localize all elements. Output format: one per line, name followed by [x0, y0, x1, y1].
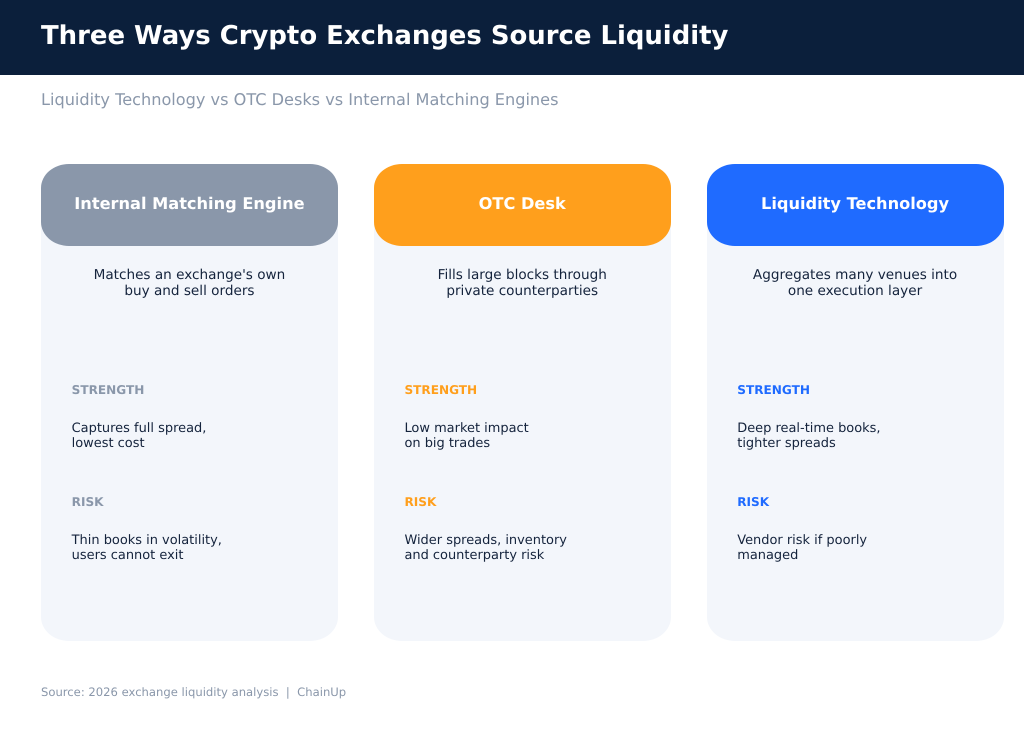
panel header: liquidity technology	[707, 164, 1004, 246]
risk label: RISK	[737, 495, 769, 509]
source footnote: Source: 2026 exchange liquidity analysis | ChainUp	[41, 685, 346, 699]
strength text: Deep real-time books,	[737, 420, 881, 436]
risk text: managed	[737, 548, 798, 563]
strength text	[72, 420, 206, 451]
panel header: liquidity technology: Liquidity Technology	[761, 194, 949, 213]
strength text: Captures full spread,	[72, 420, 206, 436]
description: private counterparties	[446, 283, 598, 299]
strength text: Low market impact	[404, 420, 529, 436]
strength text: lowest cost	[72, 436, 145, 451]
title banner	[0, 0, 1024, 75]
strength text	[737, 420, 881, 451]
strength label: STRENGTH	[404, 383, 477, 397]
description	[94, 267, 285, 299]
description: buy and sell orders	[124, 283, 254, 299]
risk text	[737, 532, 867, 563]
risk text: Wider spreads, inventory	[404, 532, 567, 548]
risk text: and counterparty risk	[404, 548, 544, 563]
title: Three Ways Crypto Exchanges Source Liquidity	[41, 20, 728, 50]
panel header: internal matching engine	[41, 164, 338, 246]
risk label: RISK	[404, 495, 436, 509]
panel: liquidity technology	[707, 164, 1004, 641]
risk text: Vendor risk if poorly	[737, 532, 867, 548]
subtitle: Liquidity Technology vs OTC Desks vs Internal Matching Engines	[41, 90, 558, 109]
strength text: on big trades	[404, 436, 490, 451]
risk text: users cannot exit	[72, 548, 183, 563]
description: Fills large blocks through	[438, 267, 607, 283]
risk text: Thin books in volatility,	[72, 532, 222, 548]
description: Matches an exchange's own	[94, 267, 285, 283]
description: one execution layer	[788, 283, 922, 299]
panel header: otc desk: OTC Desk	[479, 194, 566, 213]
strength text: tighter spreads	[737, 436, 836, 451]
panel: internal matching engine	[41, 164, 338, 641]
description: Aggregates many venues into	[753, 267, 957, 283]
panel header: otc desk	[374, 164, 671, 246]
risk text	[72, 532, 222, 563]
strength label: STRENGTH	[72, 383, 144, 397]
description	[438, 267, 607, 299]
panel: otc desk	[374, 164, 671, 641]
strength text	[404, 420, 529, 451]
strength label: STRENGTH	[737, 383, 810, 397]
risk text	[404, 532, 567, 563]
description	[753, 267, 957, 299]
panel header: internal matching engine: Internal Matching Engine	[74, 194, 305, 213]
risk label: RISK	[72, 495, 104, 509]
